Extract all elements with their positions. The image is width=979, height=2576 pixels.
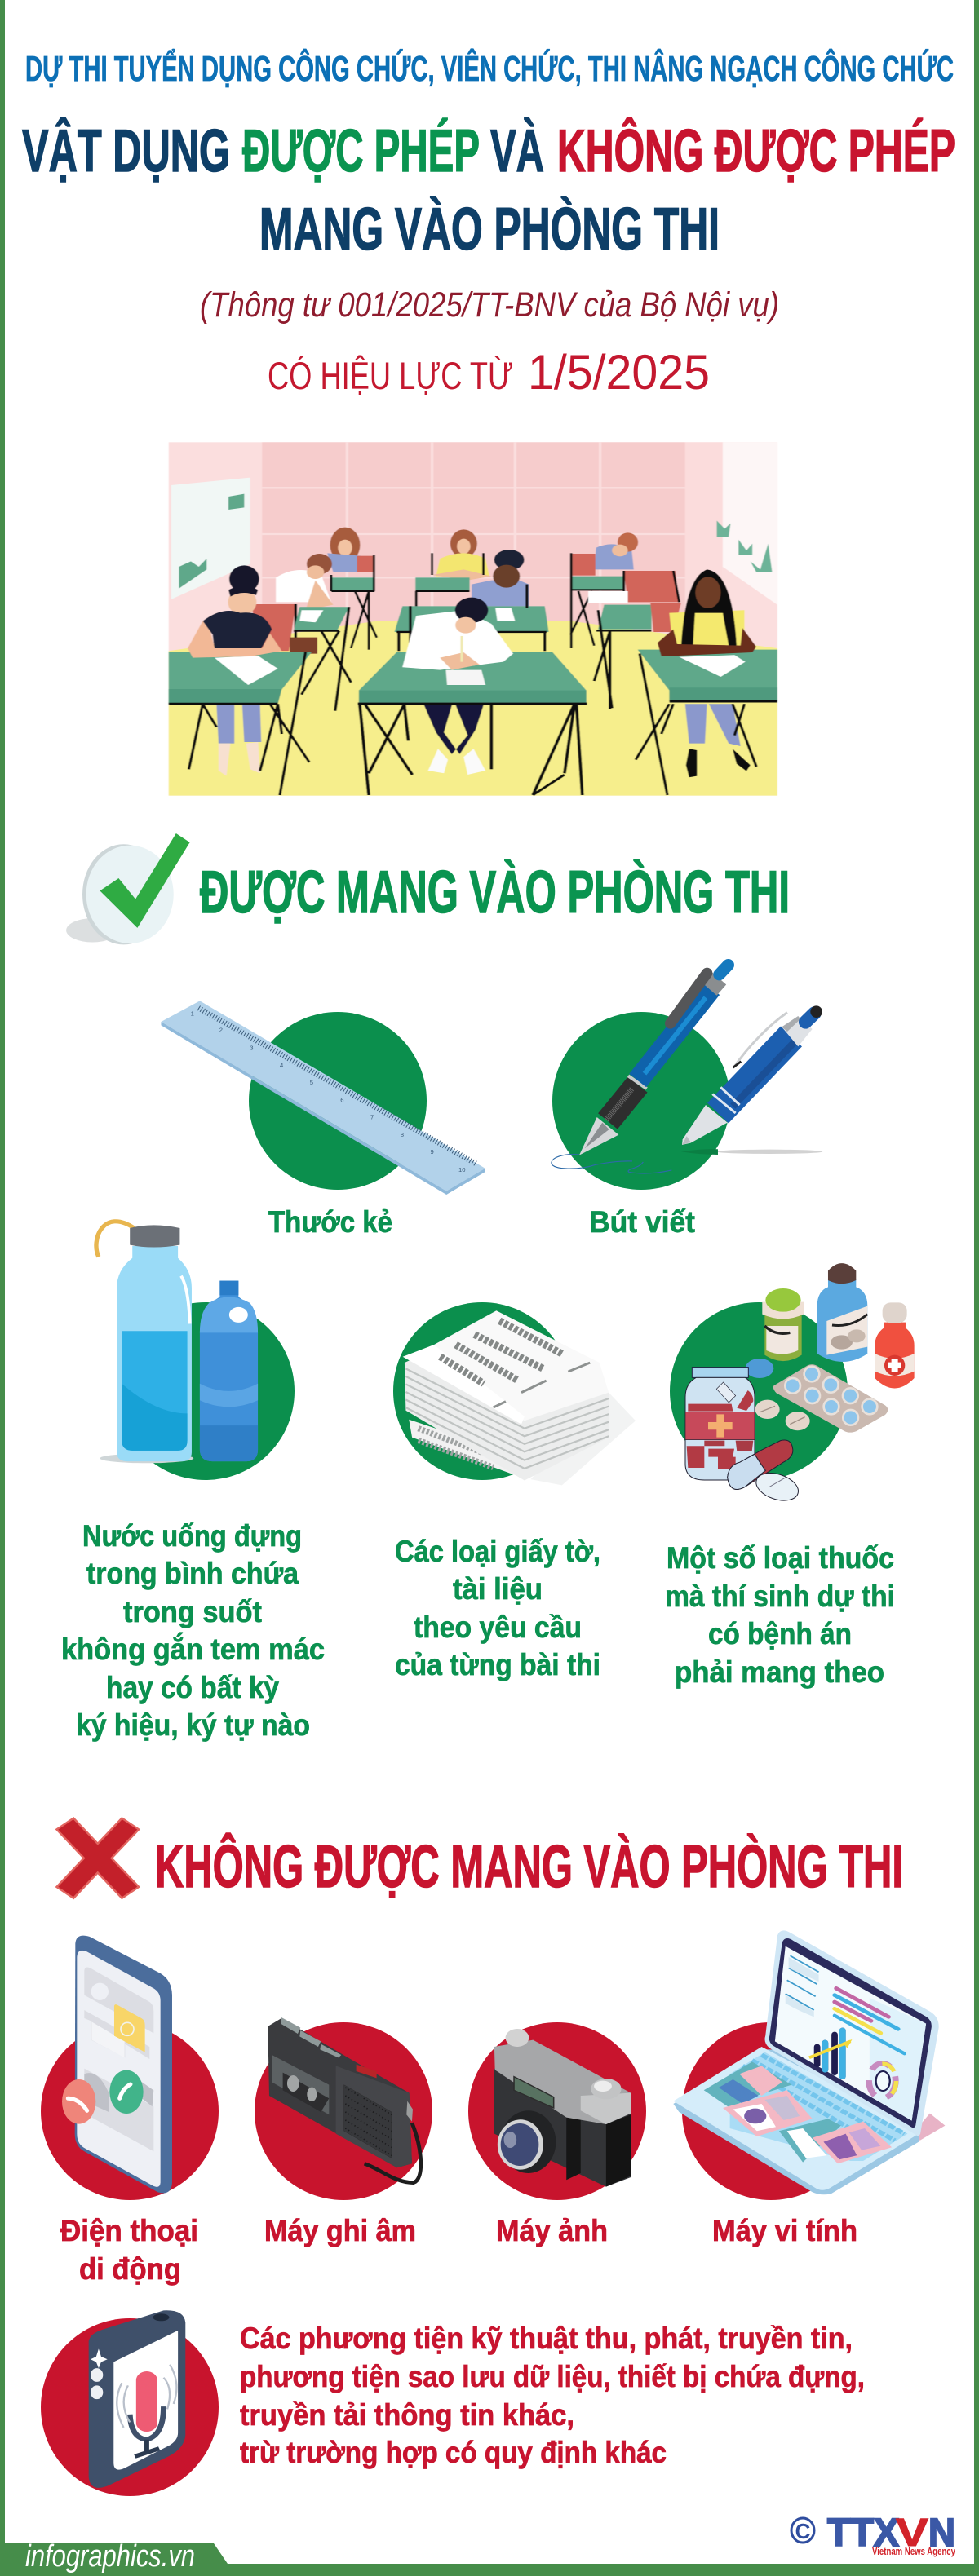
item: mobile phone: Điện thoại	[60, 2214, 198, 2247]
icon: paper stack	[403, 1310, 636, 1485]
item: mobile phone	[41, 1936, 219, 2286]
mid-row students	[276, 570, 331, 602]
item: documents	[393, 1302, 636, 1681]
icon: check mark	[66, 833, 190, 944]
icon: smartphone	[62, 1936, 172, 2193]
legal basis note: (Thông tư 001/2025/TT-BNV của Bộ Nội vụ)	[200, 285, 779, 325]
text: other devices description: trừ trường hợp có quy định khác	[240, 2436, 667, 2469]
icon: medicine	[685, 1263, 915, 1505]
icon: ruler	[161, 1001, 485, 1195]
illustration: exam room	[169, 442, 777, 796]
icon: two pens	[552, 965, 822, 1173]
item: documents: của từng bài thi	[395, 1648, 600, 1681]
item: water bottles: trong bình chứa	[86, 1557, 299, 1590]
item: medicine: có bệnh án	[708, 1617, 852, 1650]
icon: ruler: 3	[250, 1045, 254, 1051]
item: water bottles: Nước uống đựng	[82, 1519, 302, 1553]
icon: water bottles	[96, 1222, 258, 1463]
item: documents: Các loại giấy tờ,	[395, 1535, 600, 1568]
icon: camera	[494, 2029, 631, 2187]
effective date	[268, 345, 710, 400]
text: other devices description: truyền tải thông tin khác,	[240, 2398, 574, 2432]
item: ruler: Thước kẻ	[268, 1205, 392, 1239]
item: voice recorder	[255, 2017, 432, 2247]
icon: ruler: 1	[191, 1010, 194, 1018]
back-row students	[330, 528, 360, 563]
item: water bottles	[61, 1222, 325, 1742]
item: water bottles: trong suốt	[123, 1595, 262, 1628]
icon: device with microphone	[89, 2310, 185, 2488]
icon: ruler: 6	[340, 1096, 344, 1103]
title: VÀ	[490, 118, 544, 184]
item: medicine: phải mang theo	[675, 1655, 884, 1689]
item: mobile phone: di động	[79, 2252, 181, 2286]
icon: ruler: 5	[310, 1079, 313, 1086]
title: ĐƯỢC PHÉP	[242, 118, 480, 184]
title: VẬT DỤNG	[22, 118, 230, 184]
item: water bottles: hay có bất kỳ	[106, 1671, 279, 1704]
item: laptop	[673, 1930, 945, 2247]
icon: ruler: 7	[370, 1114, 374, 1121]
icon: voice recorder	[268, 2017, 421, 2183]
icon: ruler: 8	[401, 1131, 404, 1138]
icon: ruler: 9	[430, 1148, 434, 1155]
item: medicine: mà thí sinh dự thi	[665, 1580, 895, 1613]
item: pens	[552, 965, 822, 1239]
effective date: 1/5/2025	[528, 345, 710, 400]
item: camera: Máy ảnh	[496, 2214, 608, 2247]
logo: TTXVN: C	[795, 2519, 811, 2543]
icon: laptop	[673, 1930, 945, 2194]
item: camera	[468, 2022, 646, 2247]
item: medicine: Một số loại thuốc	[667, 1541, 894, 1575]
item: medicine	[665, 1263, 915, 1689]
item: water bottles: không gắn tem mác	[61, 1632, 325, 1666]
title	[22, 118, 955, 263]
logo: TTXVN: V	[896, 2512, 928, 2555]
title: MANG VÀO PHÒNG THI	[259, 197, 720, 263]
icon: ruler: 2	[219, 1027, 223, 1033]
text: other devices description	[240, 2322, 865, 2469]
item: ruler	[161, 1001, 485, 1239]
front desks	[169, 652, 312, 704]
desk legs	[189, 652, 309, 795]
text: other devices description: phương tiện sao lưu dữ liệu, thiết bị chứa đựng,	[240, 2360, 865, 2393]
student arms and leaning student over desks	[188, 621, 281, 658]
logo: TTXVN	[791, 2512, 956, 2557]
icon: ruler: 10	[458, 1166, 466, 1173]
icon: ruler: 4	[280, 1062, 283, 1069]
item: other transmission devices	[41, 2310, 865, 2496]
item: documents: tài liệu	[453, 1572, 543, 1606]
item: water bottles: ký hiệu, ký tự nào	[76, 1708, 310, 1742]
item: pens: Bút viết	[589, 1205, 695, 1239]
footer tab: infographics.vn	[25, 2539, 195, 2574]
effective date: CÓ HIỆU LỰC TỪ	[268, 354, 513, 397]
item: voice recorder: Máy ghi âm	[264, 2214, 416, 2247]
icon: red cross	[72, 1831, 124, 1885]
text: other devices description: Các phương tiện kỹ thuật thu, phát, truyền tin,	[240, 2322, 853, 2355]
item: laptop: Máy vi tính	[712, 2214, 857, 2247]
logo: TTXVN: TTX	[827, 2512, 899, 2555]
legs	[216, 705, 261, 744]
student bodies behind front desks	[229, 565, 259, 593]
section heading: allowed	[66, 833, 790, 944]
item: documents: theo yêu cầu	[414, 1611, 582, 1644]
logo: TTXVN: N	[928, 2512, 955, 2555]
